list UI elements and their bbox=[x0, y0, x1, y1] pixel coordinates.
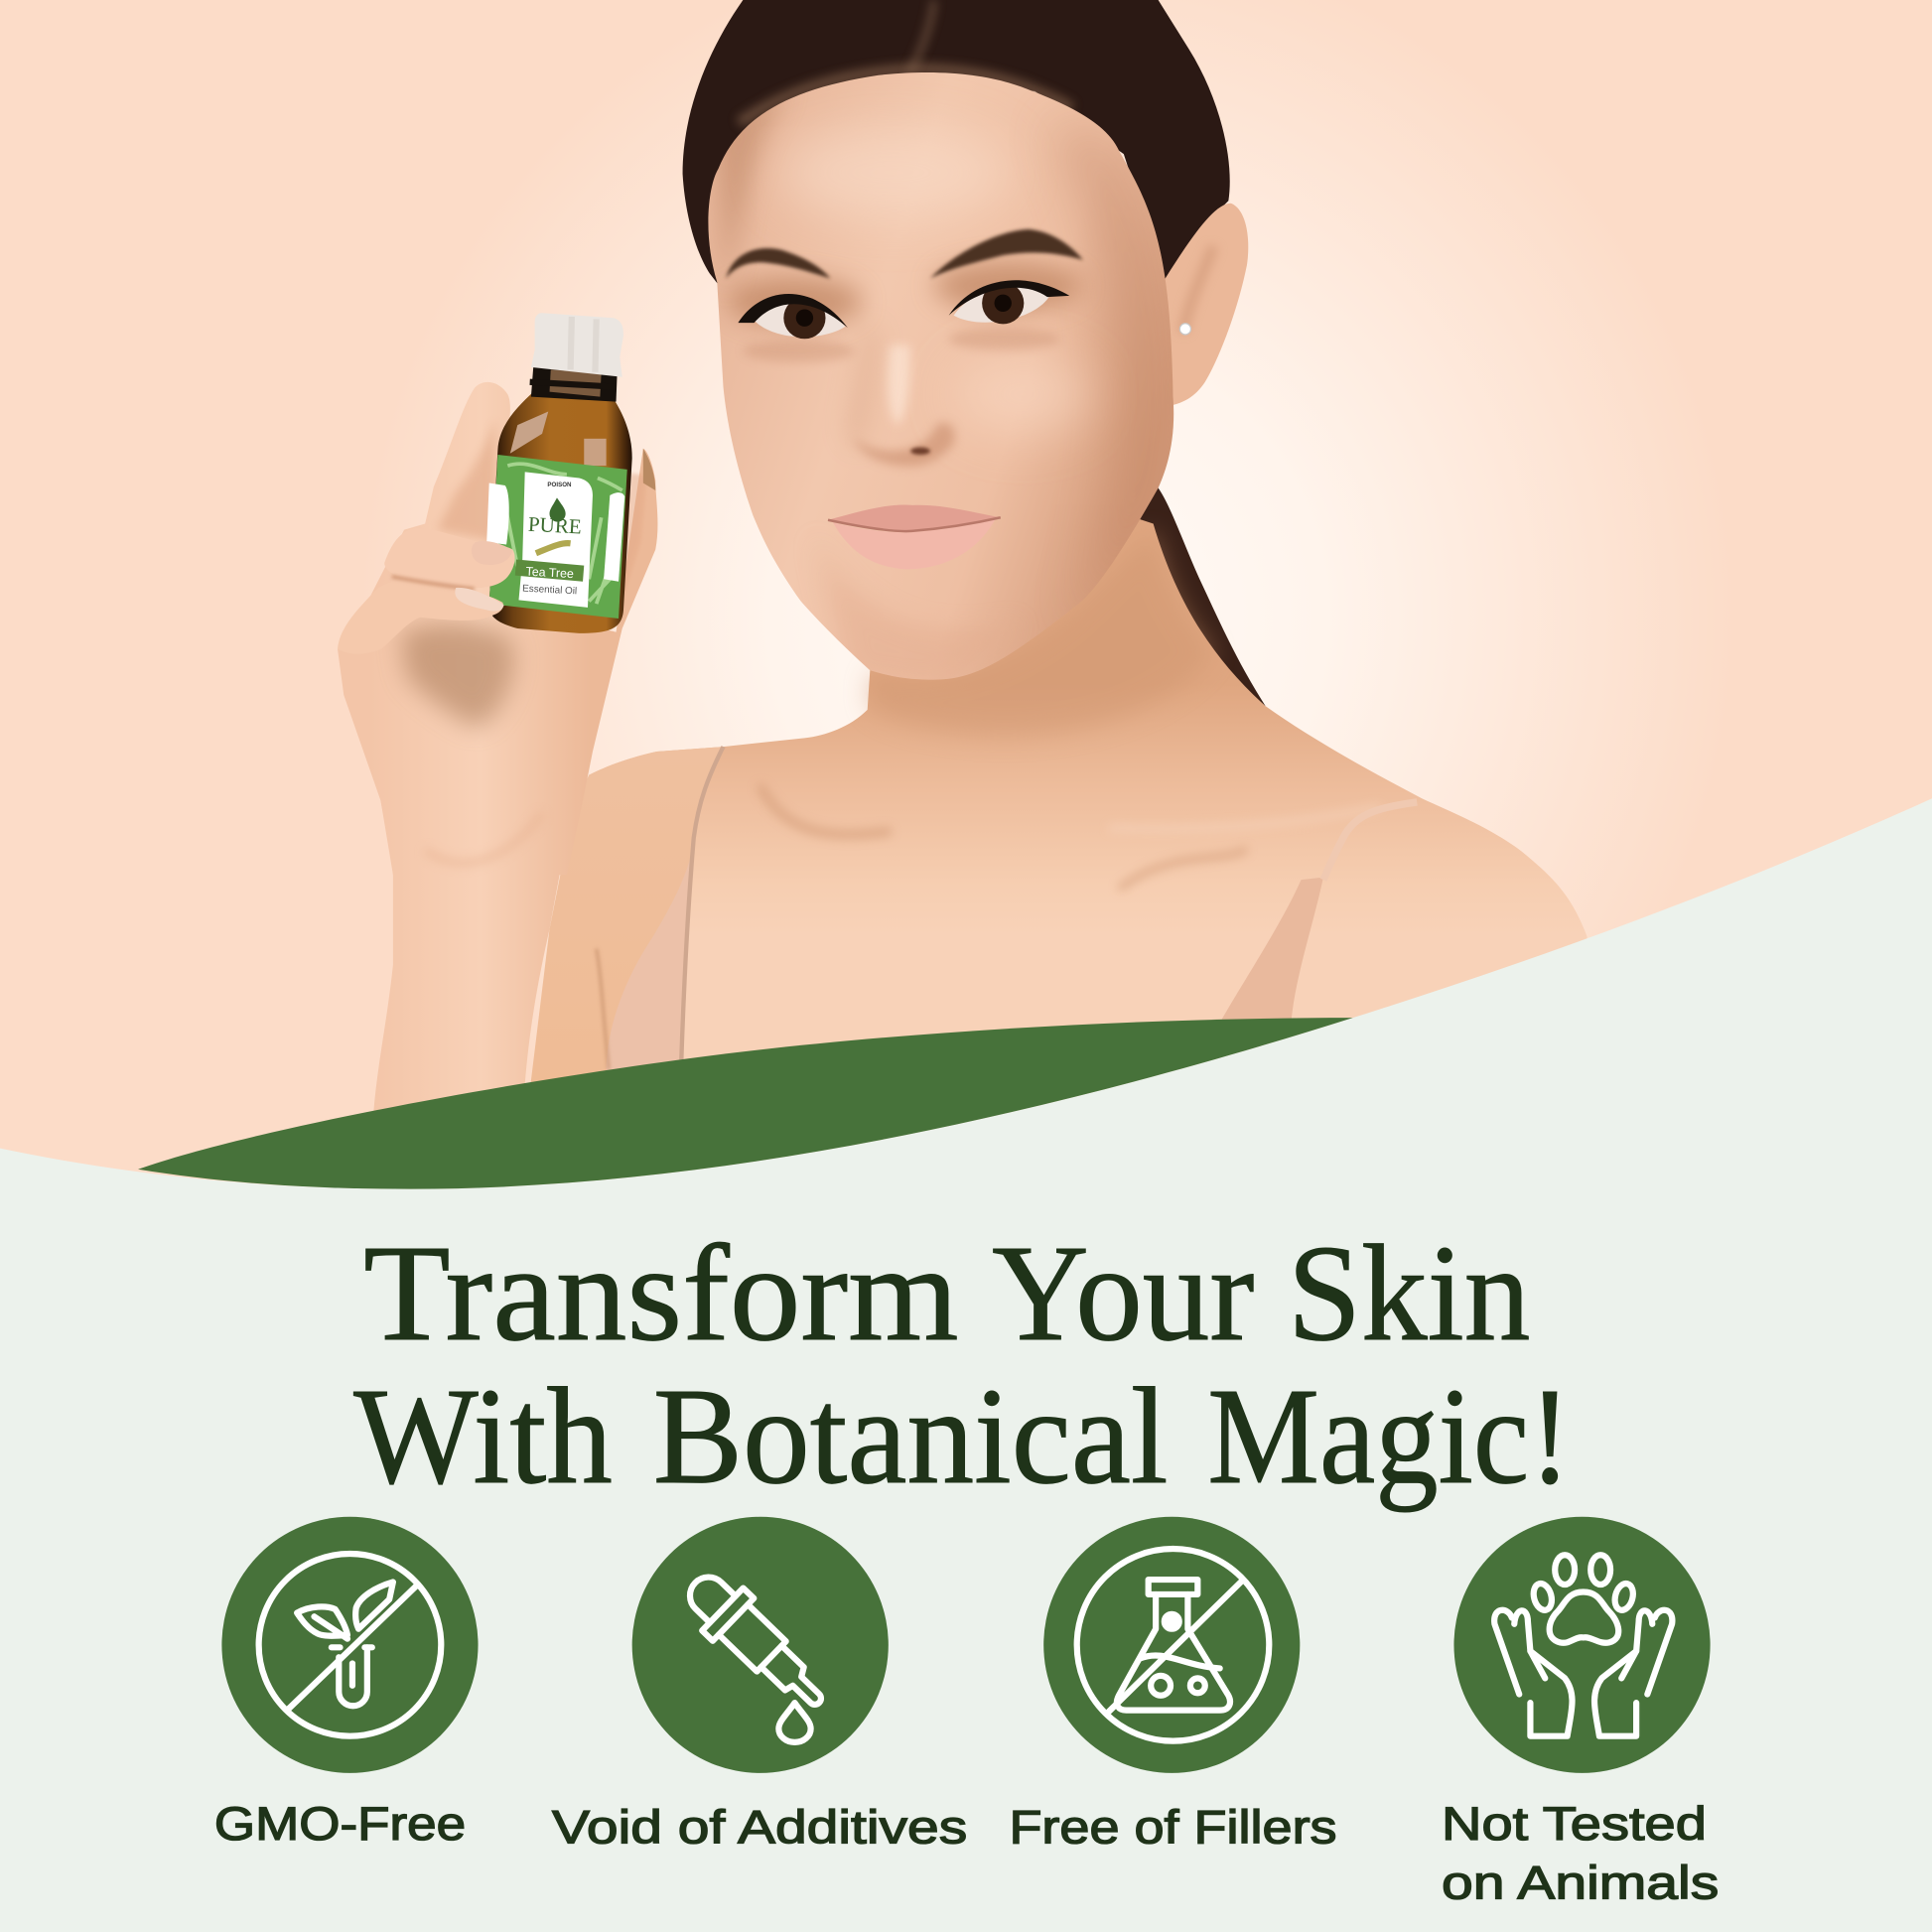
hair parting highlight bbox=[909, 0, 934, 73]
label: on Animals bbox=[1442, 1856, 1719, 1908]
right strap bbox=[1323, 802, 1417, 880]
curved accent: dark green bbox=[138, 1018, 1353, 1189]
circle bbox=[632, 1517, 889, 1773]
heading line 2: With bbox=[353, 1360, 613, 1513]
label: Void of Additives bbox=[552, 1801, 967, 1854]
left eyebrow bbox=[726, 248, 830, 278]
nose side shade bbox=[848, 336, 878, 435]
white label panel bbox=[518, 472, 593, 608]
index finger shading bbox=[438, 419, 495, 542]
badge: Not Tested on Animals bbox=[1442, 1517, 1719, 1908]
thumb nail bbox=[643, 449, 655, 490]
left top panel bbox=[607, 859, 690, 1072]
badge: Free of Fillers bbox=[1009, 1517, 1337, 1854]
label leaves bbox=[505, 464, 622, 604]
label bbox=[1442, 1797, 1719, 1908]
hairline highlight bbox=[740, 69, 1072, 123]
background: peach gradient bbox=[0, 0, 1932, 1355]
badge: GMO-Free bbox=[214, 1517, 479, 1850]
heading line 1: Skin bbox=[1288, 1217, 1530, 1370]
left shoulder side bbox=[530, 747, 724, 1090]
finger crease bbox=[392, 577, 475, 589]
lips bbox=[828, 504, 1001, 569]
eye socket shadows bbox=[727, 277, 863, 327]
bottle cap bbox=[531, 313, 623, 377]
nails bbox=[472, 541, 512, 565]
heading bbox=[353, 1217, 1571, 1513]
label poison: POISON bbox=[547, 482, 572, 488]
icon: crossed plant bbox=[259, 1554, 441, 1736]
middle finger bbox=[384, 528, 515, 588]
heading line 1: Transform bbox=[363, 1217, 959, 1370]
right top panel bbox=[1220, 878, 1323, 1023]
underarm crease bbox=[597, 949, 609, 1069]
wrist crease bbox=[425, 813, 542, 863]
label brand: PURE bbox=[527, 512, 582, 539]
face bbox=[708, 72, 1173, 680]
circle bbox=[1453, 1517, 1711, 1773]
circle bbox=[1043, 1517, 1300, 1773]
green label bbox=[489, 455, 627, 619]
heading line 2: Botanical bbox=[653, 1360, 1169, 1513]
thumb shading bbox=[612, 474, 647, 634]
fingers over bottle bbox=[338, 528, 515, 654]
face shading bbox=[715, 86, 1173, 690]
collarbone highlight bbox=[1109, 807, 1380, 829]
label: Free of Fillers bbox=[1009, 1801, 1337, 1854]
photo: woman holding bottle bbox=[338, 0, 1587, 1232]
ear bbox=[1159, 204, 1248, 407]
icon: paw and hands bbox=[1494, 1555, 1672, 1736]
palm shadow bbox=[400, 623, 514, 727]
neck ring bbox=[531, 364, 618, 402]
label: GMO-Free bbox=[214, 1797, 466, 1850]
heading line 2: Magic! bbox=[1207, 1360, 1571, 1513]
left eye bbox=[738, 294, 848, 339]
ponytail bbox=[1128, 481, 1266, 706]
side panels bbox=[604, 492, 624, 582]
icon: crossed flask bbox=[1077, 1549, 1269, 1741]
neck glass bbox=[550, 369, 602, 397]
curved panel: light green bbox=[0, 798, 1932, 1932]
torso and neck bbox=[542, 492, 1587, 1232]
collarbone shading bbox=[761, 788, 1244, 888]
label sprig bbox=[536, 543, 571, 553]
tea tree band bbox=[515, 559, 584, 582]
right eyebrow bbox=[930, 229, 1083, 278]
badge: Void of Additives bbox=[552, 1517, 967, 1854]
glass highlight bbox=[510, 412, 548, 454]
bottle glass bbox=[489, 369, 632, 633]
palm and index finger bbox=[338, 382, 657, 875]
essential oil text: Essential Oil bbox=[522, 584, 577, 597]
icon: dropper bbox=[675, 1562, 840, 1742]
under-jaw shadow bbox=[869, 530, 1213, 736]
inner ear shading bbox=[1182, 246, 1213, 333]
tea tree text: Tea Tree bbox=[525, 565, 574, 581]
left strap bbox=[681, 747, 724, 1059]
earring bbox=[1179, 324, 1190, 335]
ring finger bbox=[338, 580, 503, 654]
product bottle bbox=[486, 313, 632, 633]
hair bbox=[683, 0, 1230, 296]
heading line 1: Your bbox=[992, 1217, 1254, 1370]
label: Not Tested bbox=[1442, 1797, 1707, 1850]
forearm bbox=[373, 690, 592, 1115]
nose bbox=[853, 423, 955, 467]
circle bbox=[221, 1517, 479, 1773]
right eye bbox=[949, 280, 1069, 324]
nose bridge highlight bbox=[888, 345, 910, 425]
label drop icon bbox=[550, 497, 566, 522]
